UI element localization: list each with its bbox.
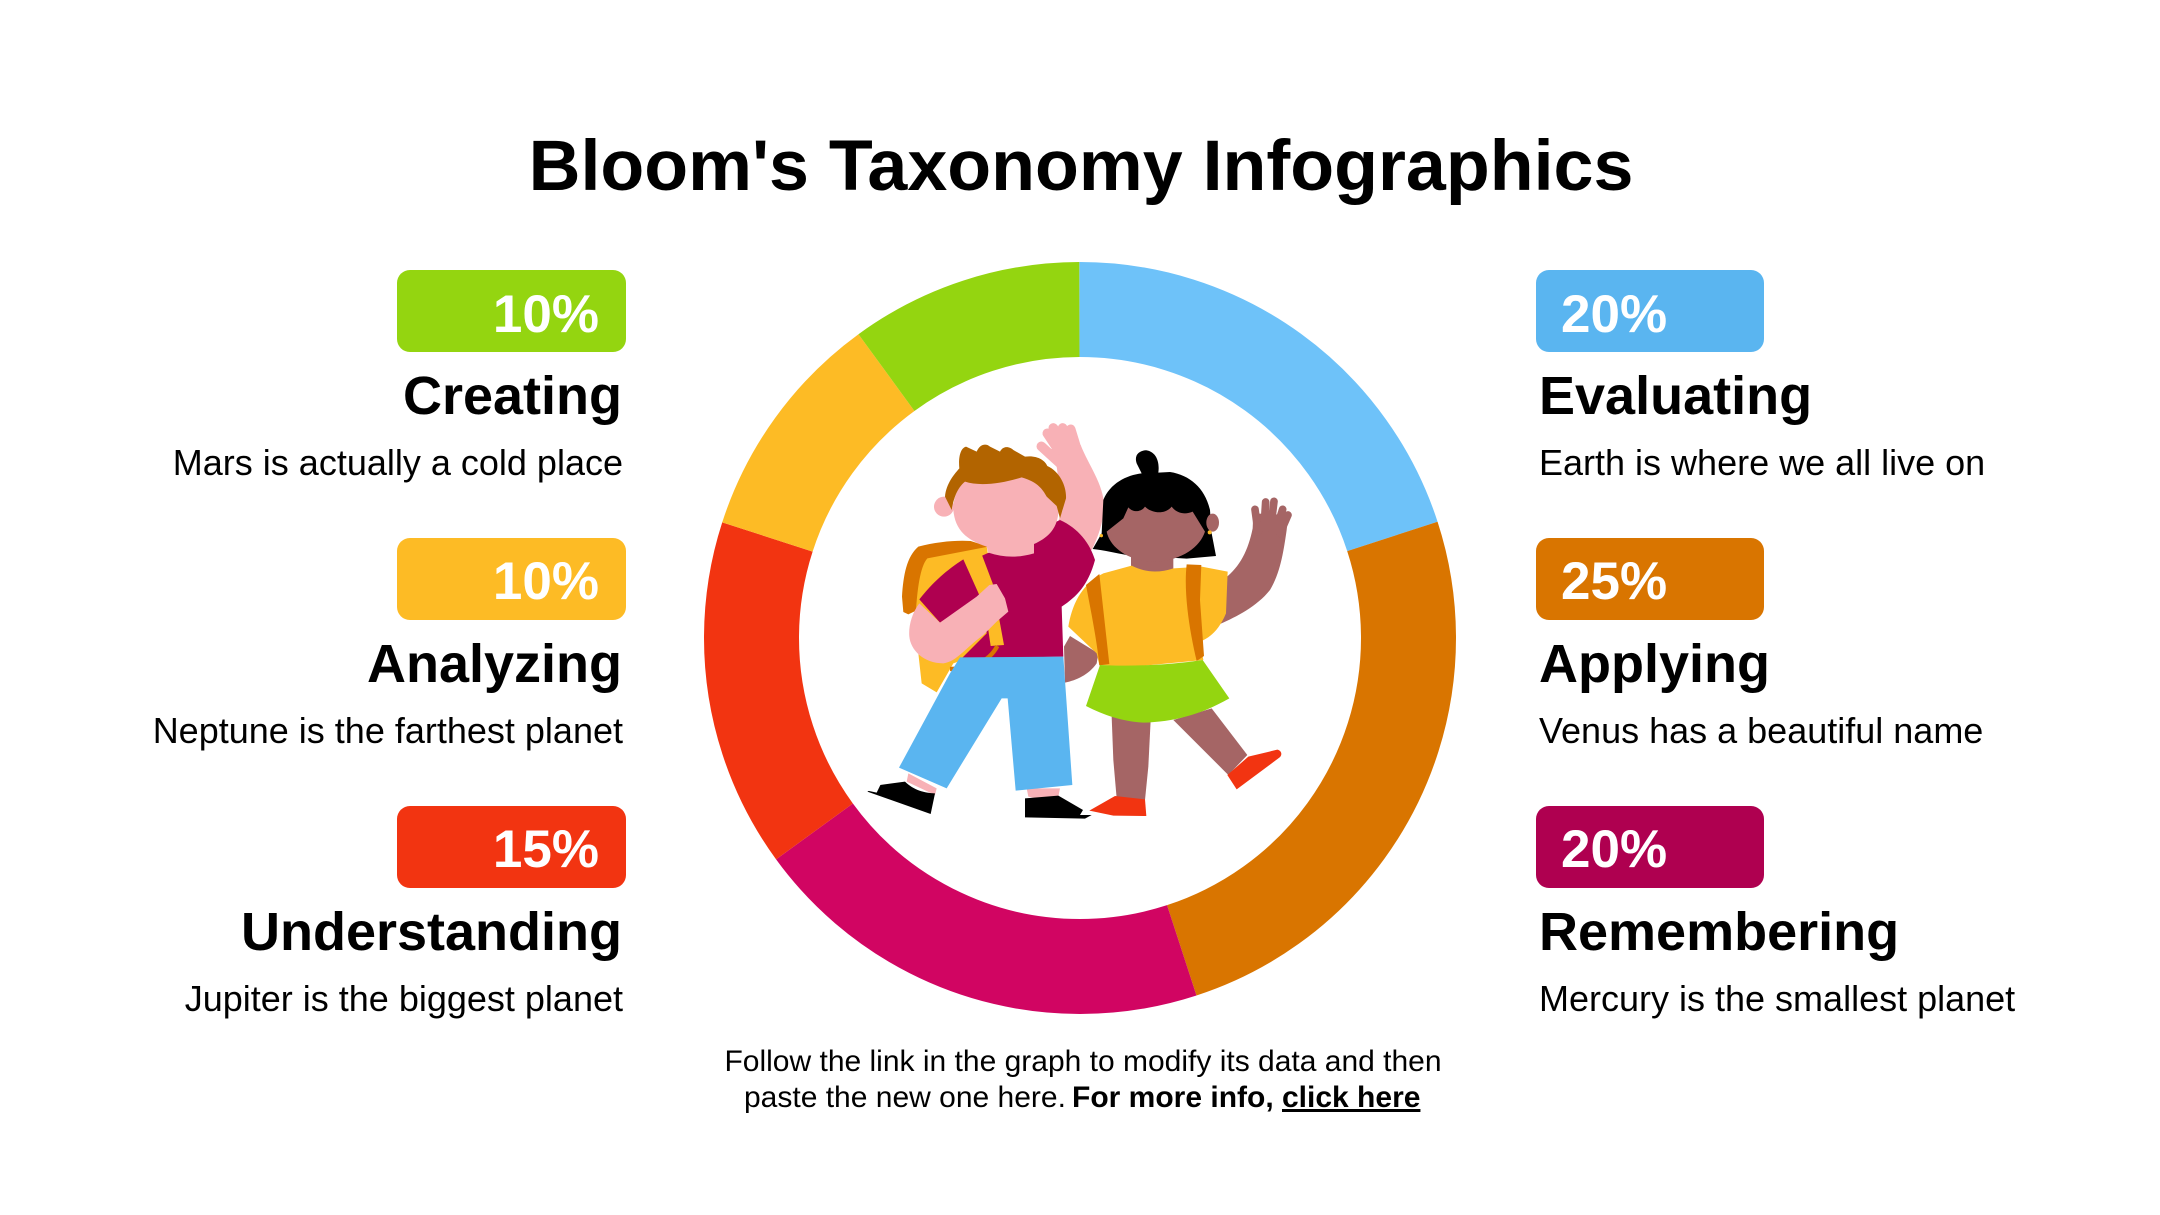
badge: 20% — [1536, 806, 1764, 888]
girl's ear — [1206, 514, 1219, 532]
segment: Understanding 15% — [752, 310, 1408, 966]
heading: Creating: Creating — [403, 366, 622, 426]
girl's standing leg — [1112, 717, 1151, 800]
girl's right strap — [1186, 564, 1204, 661]
left column: Understanding — [185, 806, 626, 1019]
girl's right arm — [1220, 513, 1288, 624]
backpack top strap — [902, 541, 988, 614]
boy's raised arm — [1044, 445, 1104, 550]
boy's arm and hand — [909, 584, 1008, 663]
boy's hair — [945, 445, 1066, 518]
heading: Analyzing: Analyzing — [367, 634, 622, 694]
description: Venus has a beautiful name — [1539, 710, 1983, 751]
girl's right shoe — [1227, 750, 1281, 789]
boy's head — [953, 468, 1058, 557]
segment: Remembering 20% — [752, 310, 1408, 966]
backpack lower strap — [950, 646, 997, 669]
girl's left strap — [1086, 574, 1109, 665]
segment: Analyzing 10% — [752, 310, 1408, 966]
badge: 25% — [1536, 538, 1764, 620]
boy's ear — [934, 497, 954, 517]
girl's face — [1107, 507, 1205, 562]
footer note: For more info, click here — [1072, 1081, 1420, 1114]
girl's earring — [1208, 530, 1212, 534]
right column: Applying — [1536, 538, 1983, 751]
boy's fingers — [1041, 428, 1076, 463]
segment: Creating 10% — [752, 310, 1408, 966]
boy's trousers — [899, 657, 1072, 791]
description: Earth is where we all live on — [1539, 442, 1985, 483]
donut chart — [752, 310, 1408, 966]
right column: Evaluating — [1536, 270, 1985, 483]
book or shirt sleeve — [919, 559, 980, 623]
heading: Understanding: Understanding — [241, 902, 622, 962]
footer note: paste the new one here. — [744, 1081, 1066, 1114]
illustration: two children waving — [867, 428, 1288, 819]
right column: Remembering — [1536, 806, 2015, 1019]
title: Bloom's Taxonomy Infographics — [529, 126, 1633, 206]
segment: Applying 25% — [752, 310, 1408, 966]
badge: 20%: 20% — [1561, 285, 1667, 344]
boy's right shoe — [1025, 796, 1092, 819]
heading: Evaluating: Evaluating — [1539, 366, 1812, 426]
description: Mercury is the smallest planet — [1539, 978, 2015, 1019]
footer note: Follow the link in the graph to modify its data and then — [724, 1045, 1442, 1078]
girl's left shoe — [1089, 796, 1146, 816]
left column: Creating — [173, 270, 626, 483]
left column: Analyzing — [153, 538, 626, 751]
girl's neck — [1131, 553, 1173, 573]
description: Neptune is the farthest planet — [153, 710, 623, 751]
boy's shirt — [962, 520, 1095, 658]
badge: 20%: 20% — [1561, 820, 1667, 879]
badge: 15% — [397, 806, 626, 888]
girl's back arm — [1064, 636, 1098, 683]
backpack body — [915, 547, 1004, 692]
badge: 10% — [397, 270, 626, 352]
description: Jupiter is the biggest planet — [185, 978, 623, 1019]
badge: 20% — [1536, 270, 1764, 352]
badge: 15%: 15% — [493, 820, 599, 879]
girl's kicking leg — [1173, 708, 1247, 775]
boy's left shoe — [867, 782, 935, 814]
girl's hair back — [1093, 450, 1216, 559]
backpack shoulder strap — [966, 552, 1004, 646]
girl's fingers — [1255, 501, 1288, 533]
segment: Evaluating 20% — [752, 310, 1408, 966]
footer note — [724, 1045, 1442, 1114]
badge: 25%: 25% — [1561, 552, 1667, 611]
girl's skirt — [1086, 660, 1229, 723]
boy's legs — [907, 773, 1060, 800]
heading: Applying: Applying — [1539, 634, 1770, 694]
badge: 10%: 10% — [493, 285, 599, 344]
girl's shirt — [1068, 566, 1228, 667]
badge: 10% — [397, 538, 626, 620]
description: Mars is actually a cold place — [173, 442, 623, 483]
heading: Remembering: Remembering — [1539, 902, 1899, 962]
badge: 10%: 10% — [493, 552, 599, 611]
